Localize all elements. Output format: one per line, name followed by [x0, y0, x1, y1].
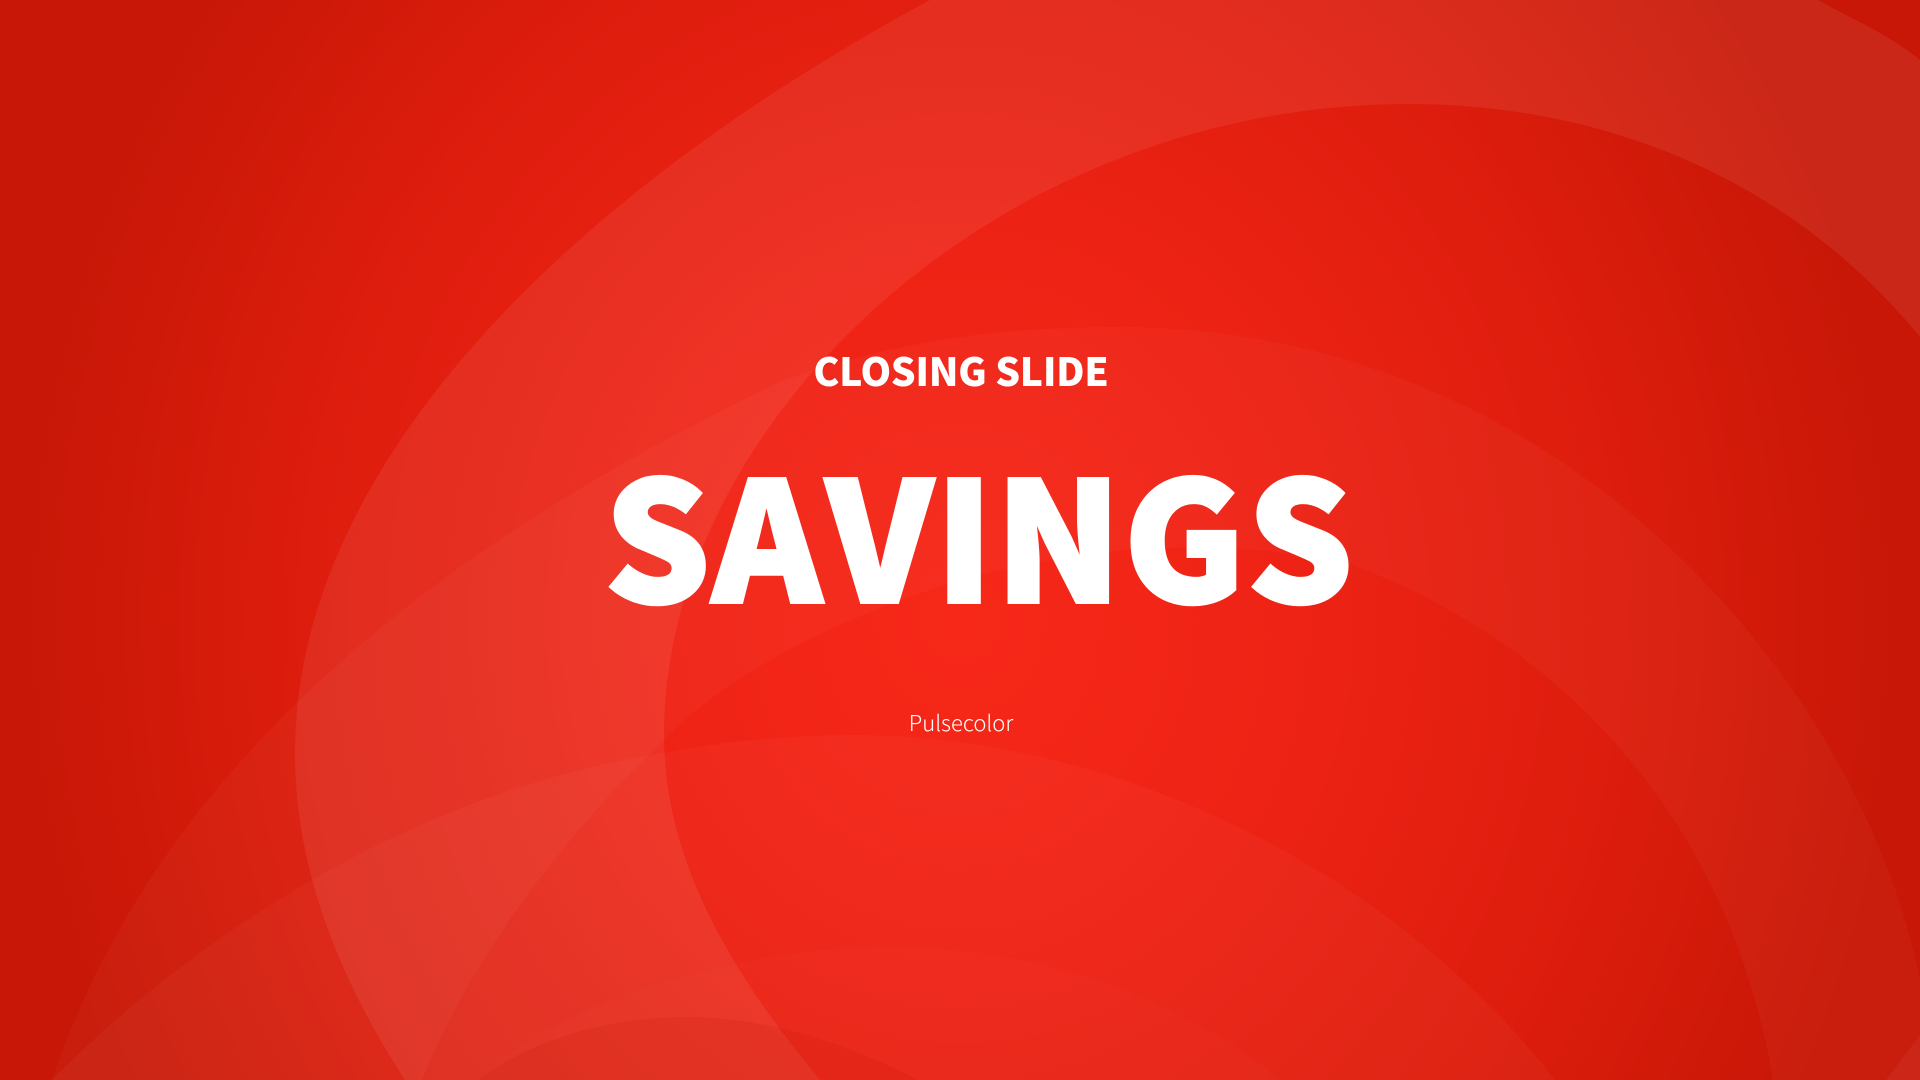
swoosh: dark bottom arc [478, 1017, 918, 1080]
swoosh: middle band [52, 327, 1920, 1080]
subtitle: pulsecolor: Pulsecolor [909, 706, 1013, 738]
title: savings: SAVINGS [605, 411, 1355, 650]
swoosh: bottom right corner [1886, 1035, 1920, 1080]
swoosh: lower band [52, 735, 1555, 1080]
kicker: closing slide: CLOSING SLIDE [813, 342, 1109, 398]
swoosh: faint lower arc [478, 947, 1280, 1080]
